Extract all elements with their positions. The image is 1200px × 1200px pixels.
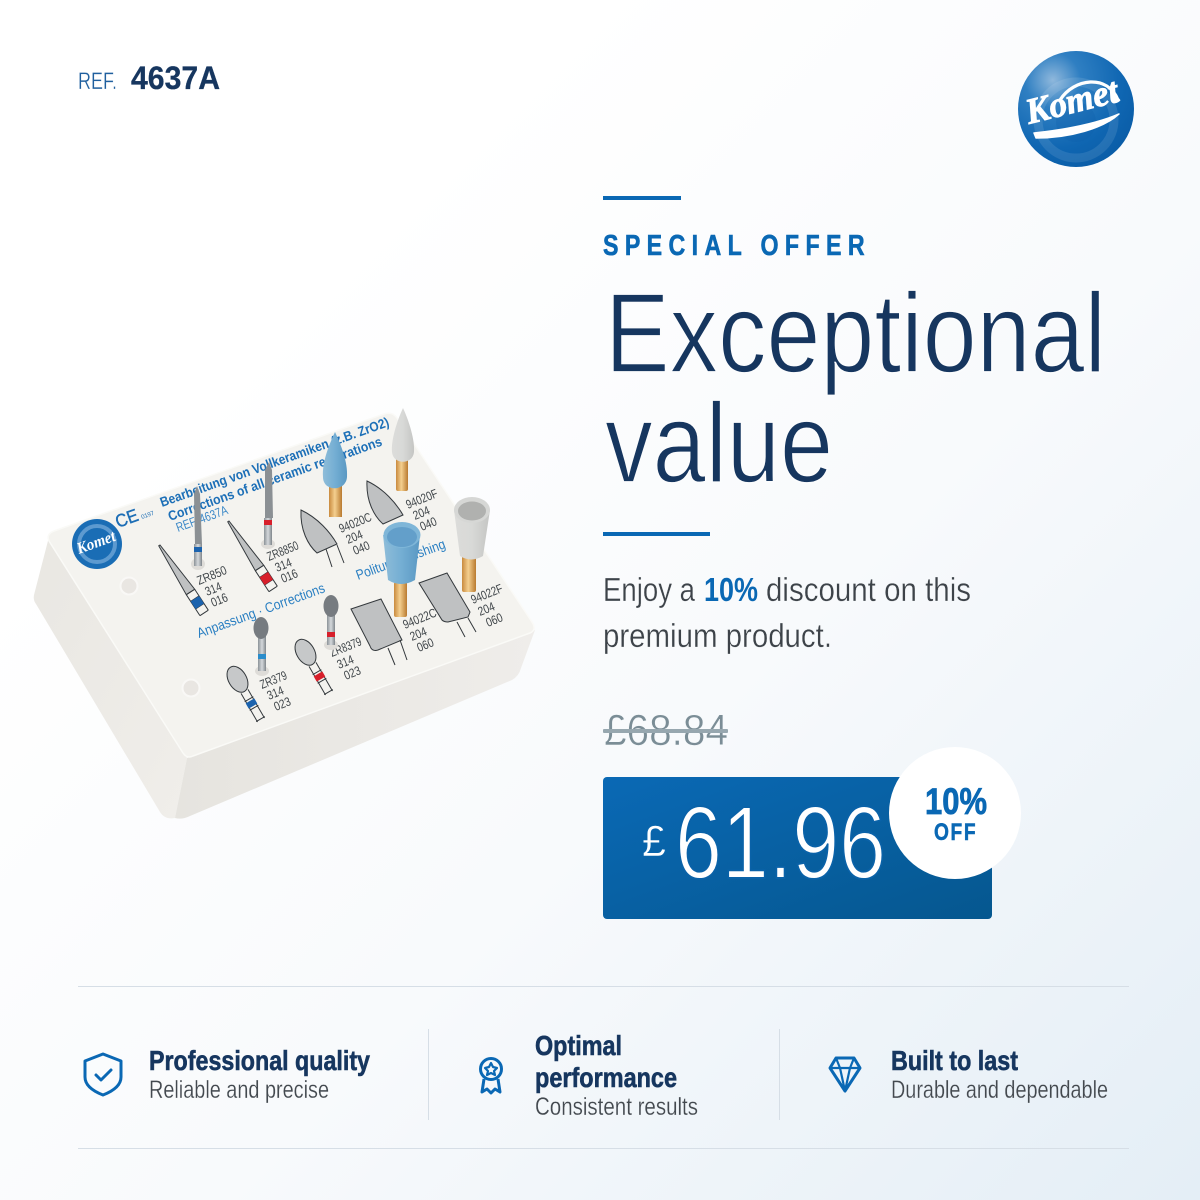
discount badge: OFF (934, 818, 976, 846)
tray CE mark: 0197 (141, 510, 156, 521)
bur and polisher codes: 040 (418, 514, 439, 534)
Komet logo: Komet (1020, 70, 1123, 132)
bur and polisher codes: 023 (342, 663, 363, 683)
tray headings (158, 415, 447, 641)
bur and polisher codes: 94020C (337, 510, 374, 536)
reference code: REF. (78, 68, 117, 95)
tray headings: REF. 4637A (174, 502, 230, 535)
discount copy: 10% (704, 571, 758, 608)
tray CE mark: CE (113, 505, 141, 532)
old price struck through: £68.84 (604, 706, 728, 755)
accent rule middle (603, 532, 710, 536)
discount badge: 10% (925, 781, 987, 822)
bur diagrams (156, 481, 476, 724)
headline (605, 270, 1106, 506)
bur and polisher codes: 94020F (404, 486, 440, 512)
tray small logo (72, 519, 122, 569)
bur and polisher codes: 314 (273, 555, 294, 575)
feature: professional quality (85, 1045, 370, 1104)
Komet logo (1018, 51, 1134, 167)
tray holes (120, 578, 200, 696)
icon: award rosette (480, 1058, 502, 1093)
bur and polisher codes: 204 (344, 527, 365, 547)
bur and polisher codes: ZR379 (258, 668, 289, 692)
reference code (78, 60, 220, 96)
bur and polisher codes: 94022C (401, 606, 439, 632)
headline: Exceptional (605, 270, 1106, 396)
feature: professional quality: Reliable and precise (149, 1076, 329, 1104)
bur and polisher codes: 204 (411, 503, 432, 523)
bur and polisher codes: 314 (203, 579, 224, 599)
headline: value (605, 380, 833, 506)
price box: £ (642, 817, 666, 866)
polisher 94020F (392, 408, 414, 491)
eyebrow: special offer: SPECIAL OFFER (603, 228, 865, 262)
diamond bur ZR8379 (324, 595, 338, 650)
discount copy: discount on this (766, 571, 971, 608)
discount copy: premium product. (603, 617, 832, 654)
feature: optimal performance (480, 1030, 698, 1121)
discount badge (889, 747, 1021, 879)
discount copy: Enjoy a (603, 571, 696, 608)
bur and polisher codes: 040 (351, 538, 372, 558)
bur and polisher codes: 204 (476, 599, 497, 619)
price box: 61.96 (675, 785, 886, 900)
bur and polisher codes: ZR8850 (265, 538, 301, 564)
feature: built to last (830, 1045, 1108, 1104)
polisher 94022F (454, 497, 490, 592)
diamond bur ZR850 (191, 486, 205, 570)
discount copy (603, 571, 971, 654)
bur and polisher codes: 060 (484, 610, 505, 630)
feature: optimal performance: Consistent results (535, 1093, 698, 1121)
tray left side (34, 533, 187, 818)
feature: built to last: Durable and dependable (891, 1076, 1108, 1104)
bur and polisher codes: ZR850 (195, 563, 229, 588)
feature: optimal performance: Optimal (535, 1030, 622, 1061)
accent rule top (603, 196, 681, 200)
tray front side (175, 630, 535, 819)
tray headings: Corrections of all ceramic restorations (166, 434, 384, 524)
diamond bur ZR379 (254, 617, 269, 676)
icon: shield check (85, 1054, 121, 1095)
bur and polisher codes: 94022F (469, 581, 505, 607)
product: bur tray (34, 408, 535, 819)
feature: built to last: Built to last (891, 1045, 1018, 1076)
bur and polisher codes: 314 (335, 652, 356, 672)
price box (603, 777, 992, 919)
polisher 94022C (383, 522, 420, 617)
tray small logo: Komet (74, 528, 118, 558)
icon: diamond (830, 1058, 860, 1091)
feature: professional quality: Professional quality (149, 1045, 370, 1076)
polisher 94020C (323, 432, 347, 517)
tray headings: Politur · Polishing (354, 536, 447, 583)
reference code: 4637A (131, 60, 220, 96)
bur and polisher codes (195, 486, 505, 714)
bur and polisher codes: ZR8379 (328, 634, 364, 660)
bur and polisher codes: 023 (272, 694, 293, 714)
bur and polisher codes: 016 (209, 590, 230, 610)
bur and polisher codes: 060 (415, 635, 436, 655)
tray top face (48, 413, 534, 757)
tray CE mark (113, 505, 156, 532)
bur and polisher codes: 016 (279, 566, 300, 586)
bur and polisher codes: 204 (408, 624, 429, 644)
tray headings: Anpassung · Corrections (195, 580, 327, 641)
bur and polisher codes: 314 (265, 683, 286, 703)
tray headings: Bearbeitung von Vollkeramiken (z.B. ZrO2) (158, 415, 391, 510)
diamond bur ZR8850 (261, 462, 275, 549)
feature: optimal performance: performance (535, 1062, 677, 1093)
